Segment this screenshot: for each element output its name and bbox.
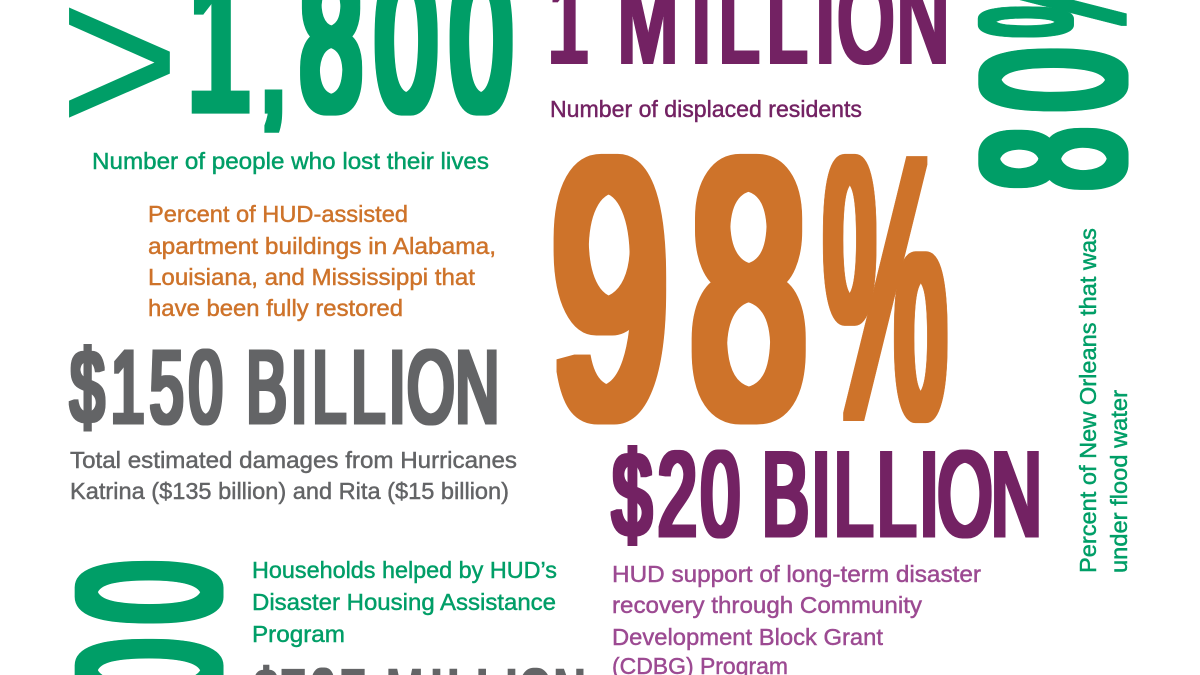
caption: displaced residents: Number of displaced residents: [550, 96, 862, 122]
caption: CDBG program: recovery through Community: [612, 592, 923, 618]
caption: damages: Katrina ($135 billion) and Rita ($15 billion): [70, 478, 509, 504]
statistic: displaced residents: [548, 0, 949, 122]
caption: flood water, rotated: Percent of New Orleans that was: [1075, 228, 1101, 573]
statistic: CDBG support: [612, 427, 1042, 675]
big number: 150 billion dollars: $150 BILLION: [70, 329, 499, 445]
caption: restored buildings: Louisiana, and Mississippi that: [148, 264, 476, 290]
caption: restored buildings: [148, 201, 496, 321]
big number: 98 percent: 98: [552, 85, 807, 492]
caption: flood water, rotated: under flood water: [1106, 390, 1132, 573]
caption: CDBG program: [612, 561, 981, 675]
caption: flood water, rotated: [1075, 228, 1132, 573]
caption: damages: [70, 447, 517, 504]
caption: damages: Total estimated damages from Hurricanes: [70, 447, 517, 473]
statistic: flooded share of New Orleans: [939, 0, 1169, 573]
caption: restored buildings: have been fully restored: [148, 295, 403, 321]
statistic: households helped: [38, 557, 585, 675]
caption: disaster housing assistance: Households helped by HUD’s: [252, 557, 557, 583]
caption: lives lost: Number of people who lost their lives: [92, 148, 489, 174]
statistic: total damages: [70, 329, 517, 504]
caption: disaster housing assistance: Program: [252, 621, 345, 647]
caption: disaster housing assistance: Disaster Housing Assistance: [252, 589, 556, 615]
caption: disaster housing assistance: [252, 557, 557, 647]
caption: restored buildings: Percent of HUD-assisted: [148, 201, 408, 227]
big number: 20 billion dollars: $20 BILLION: [613, 427, 1042, 561]
big number: 80 percent, rotated: 80: [942, 49, 1166, 190]
caption: restored buildings: apartment buildings in Alabama,: [148, 233, 496, 259]
statistic: restored apartment buildings: [148, 80, 947, 496]
big number: 98 percent: %: [823, 80, 947, 496]
big number: 98 percent: [552, 80, 947, 496]
caption: CDBG program: HUD support of long-term disaster: [612, 561, 981, 587]
caption: CDBG program: Development Block Grant: [612, 624, 884, 650]
statistic: lives lost: [59, 0, 512, 179]
big number: more than 1,800: [59, 0, 512, 179]
